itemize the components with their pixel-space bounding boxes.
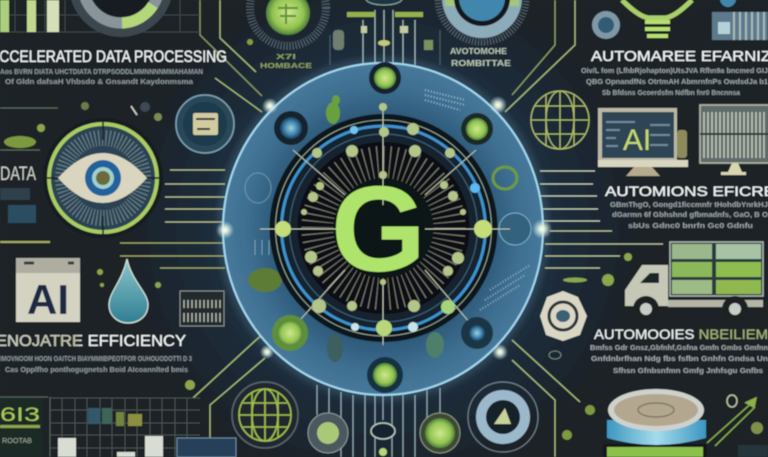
heading: automated efficiency top: AUTOMAREE EFARNIZ [591,48,768,65]
decorative badges bottom right [549,351,768,457]
text block: automated efficiency top: Sb Bfdsns Gcoerdsfm Ndfbn fnr0 Bncnnsa [602,90,740,97]
top connector lines [330,0,440,65]
icon: top right globe [531,91,589,149]
icon: right monitor [700,105,768,175]
panel: top left chart [0,0,200,37]
icon: canister [603,389,707,457]
panel: bottom left number box: ROOTAB [2,438,32,445]
panel: bottom left grid chart [50,398,236,457]
icon: cream eye badge [540,291,587,341]
icon: small top badge [592,11,620,39]
text block: innovate efficiency [0,356,192,374]
heading: automations efficiency: AUTOMIONS EFICRE [605,183,768,199]
panel: top left badge with green core [247,0,344,50]
icon: AI monitor [598,108,688,176]
text block: automated efficiency top: QBG OpnandfNs OtrtmAH AbmrnfnPs OwdsdJa b1 [586,79,768,86]
icon: growth arrow [707,398,756,446]
spokes [260,107,510,345]
text block: accelerated data processing [0,69,203,86]
text block: automations efficiency: dGarmn 6f Gbhshnd gfbmadnfs, GaO, B O [612,212,768,219]
icon: bottom blue badge [468,382,538,452]
heading: innovate efficiency: ENOJATRE EFFICIENCY [0,333,186,350]
icon: small chip [180,291,224,326]
text block: accelerated data processing: Aos BVRN DIATA UHCTDIATA DTRPSODDLMMNNNNMMAHAMAN [0,69,203,76]
icon: bottom green badge [420,413,460,453]
icon: bottom globe [232,382,298,448]
central ring [217,57,549,401]
text block: automotive intelligence [590,345,768,375]
icon: AI card: AI [27,276,69,323]
icon: AI monitor: AI [623,124,651,157]
text block: automations efficiency: sbUs Gdnc0 bnrfn Gc0 Gdnfu [628,223,753,230]
label: top left badge: HOMBACE [260,61,312,70]
central core [270,114,498,342]
text block: innovate efficiency: Cas Opplfho ponthogugnetsh Boid AIcoannlted bmis [5,367,188,374]
panel: left data chart: DATA [0,164,36,185]
bottom connector lines [317,385,440,457]
letter G logo: G [331,161,426,297]
panel: top right image [712,0,768,40]
panel: top right badge with blue core [438,0,526,42]
label: top left badge: X7I [276,52,296,61]
text block: automated efficiency top: Oiv/L fom (LfhbRjohapton)UtsJVA Rfhn9a bncmed GIJ [581,68,768,75]
icon: water drop [109,259,148,323]
label: top left badge [260,52,312,70]
text block: automotive intelligence: Bmfss Gdr Gnsz,Gbfnhf,Gsfna Gmfn Gmbs Gmfnn [590,345,768,352]
text block: automations efficiency: GBmThgO, Gongd1ficcmnfr tHohdbYnrkHJ [610,202,768,209]
inner nodes [275,103,492,336]
decorative green dots near truck [563,253,632,286]
heading: automotive intelligence: AUTOMOOIES NBEILIEM [594,326,768,342]
panel: bottom left number box: 6I3 [0,405,40,426]
icon: bottom grey badge [308,413,348,453]
label: top right badge: ROMBITTAE [451,59,512,68]
icon: chip badge [176,95,234,153]
icon: bottom small oval [371,423,395,456]
text block: accelerated data processing: Of Gldn dafsaH Vhbsdo & Gnsandt Kaydonmsma [5,79,193,86]
label: top right badge [450,47,512,68]
label: top right badge: AVOTOMOHE [450,47,508,56]
panel: bottom left number box [0,397,50,457]
text block: automations efficiency [610,202,768,230]
icon: AI card [16,258,80,323]
icon: eye [43,118,163,238]
ring decorations [245,90,531,362]
text block: innovate efficiency: IMOVNOOM HOON OAITCH BIAYMMIIBPEOTFOR OUHOUODOTTI D 3 [0,356,192,363]
outer ring nodes [272,62,493,393]
glow points [216,96,552,360]
text block: automotive intelligence: Gnfdnbrfhan Ndg fbs fsfbn Gnhfn Gndsa Un [591,356,768,363]
icon: top light bulb [622,0,692,36]
decorative dots near AI [97,269,195,390]
text block: automated efficiency top [581,68,768,97]
panel: left data chart [0,102,162,223]
icon: delivery truck [625,242,763,322]
text block: automotive intelligence: Sfhsn Gfnbsnfmn Gmfg Jnhfsgu Gnfbs [613,368,763,375]
